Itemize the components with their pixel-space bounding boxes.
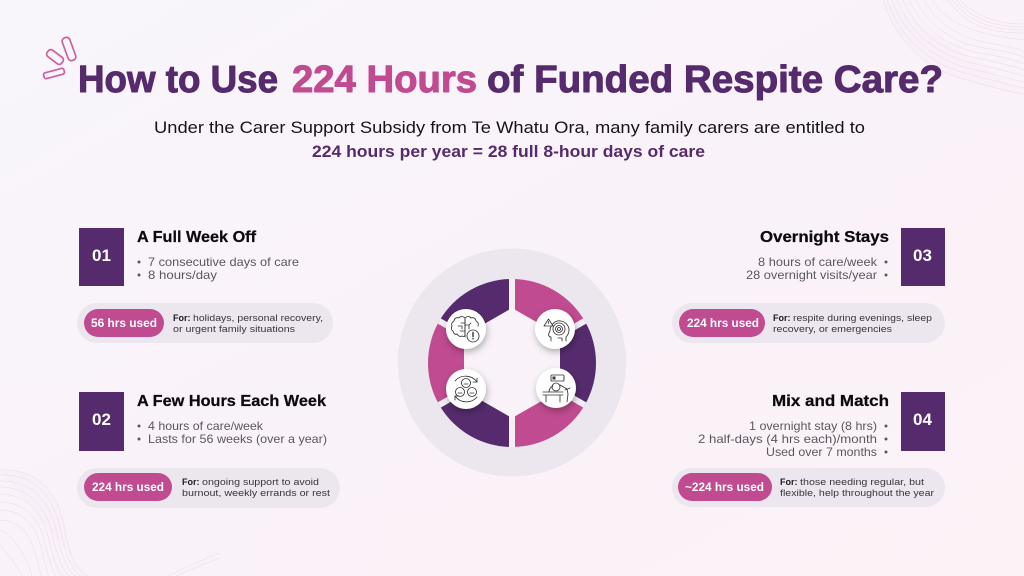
usage bar 03: recovery, or emergencies [773,324,892,335]
segment: top right [512,279,585,363]
usage bar 01: 56 hrs used [91,318,157,330]
bullet list 03 [746,255,888,282]
usage bar 01 [77,303,333,343]
number badge 04 [901,392,945,451]
panel: 02 a few hours each week [77,392,340,508]
usage bar 01: For: [173,313,190,324]
heading 04: Mix and Match [772,393,889,410]
central ring diagram [398,248,626,476]
usage bar 03: For: [773,313,790,324]
subtitle: 224 hours per year = 28 full 8-hour days of care [312,143,705,161]
title: of Funded Respite Care? [487,59,943,101]
usage bar 04: flexible, help throughout the year [780,488,935,499]
title: How to Use [78,59,278,101]
segment: right [512,321,596,405]
heading 01: A Full Week Off [137,229,257,246]
bullet list 02 [138,419,327,446]
icon: tired person at desk with low battery [536,368,576,408]
segment: top left [439,279,512,363]
heading 03: Overnight Stays [760,229,889,246]
decorative waves: bottom left [0,470,220,576]
usage bar 02: ongoing support to avoid [202,477,319,488]
usage bar 02 [77,468,340,508]
panel: 01 a full week off [77,228,333,343]
usage bar 04 [672,468,945,507]
segment: left [428,321,512,405]
usage bar 01: holidays, personal recovery, [193,313,323,324]
icon: sparkle accent [43,36,77,79]
usage bar 02: 224 hrs used [92,482,164,494]
bullet list 04: 1 overnight stay (8 hrs) [749,419,877,433]
title [78,59,943,101]
usage bar 02: burnout, weekly errands or rest [182,488,330,499]
bullet list 01: 8 hours/day [148,268,217,282]
icon: brain with alert [446,309,486,349]
icon: head with gear and warning [535,309,575,349]
usage bar 02: For: [182,477,200,488]
icon: three faces in cycle [446,369,486,409]
usage bar 04: ~224 hrs used [685,482,764,494]
number badge 02: 02 [92,410,111,429]
usage bar 01: or urgent family situations [173,324,295,335]
panel: 04 mix and match [672,392,945,507]
number badge 04: 04 [913,410,932,429]
number badge 03 [901,228,945,286]
bullet list 04 [698,419,888,459]
inner hexagon [464,308,560,418]
bullet list 04: Used over 7 months [766,445,877,459]
bullet list 01 [138,255,299,282]
segment: bottom left [439,363,512,447]
usage bar 03: respite during evenings, sleep [793,313,932,324]
usage bar 03 [672,303,945,343]
usage bar 04: those needing regular, but [800,477,924,488]
bullet list 01: 7 consecutive days of care [148,255,299,269]
title: 224 Hours [292,59,477,101]
bullet list 03: 28 overnight visits/year [746,268,877,282]
number badge 02 [79,392,124,451]
number badge 01: 01 [92,246,111,265]
bullet list 03: 8 hours of care/week [758,255,878,269]
bullet list 02: Lasts for 56 weeks (over a year) [148,432,327,446]
subtitle [154,119,865,161]
subtitle: Under the Carer Support Subsidy from Te Whatu Ora, many family carers are entitled to [154,119,865,137]
usage bar 03: 224 hrs used [687,318,759,330]
usage bar 04: For: [780,477,798,488]
bullet list 02: 4 hours of care/week [148,419,264,433]
number badge 03: 03 [913,246,932,265]
decorative waves: top right [883,0,1024,94]
number badge 01 [79,228,124,286]
heading 02: A Few Hours Each Week [137,393,326,410]
bullet list 04: 2 half-days (4 hrs each)/month [698,432,877,446]
segment: bottom right [512,363,585,447]
panel: 03 overnight stays [672,228,945,343]
